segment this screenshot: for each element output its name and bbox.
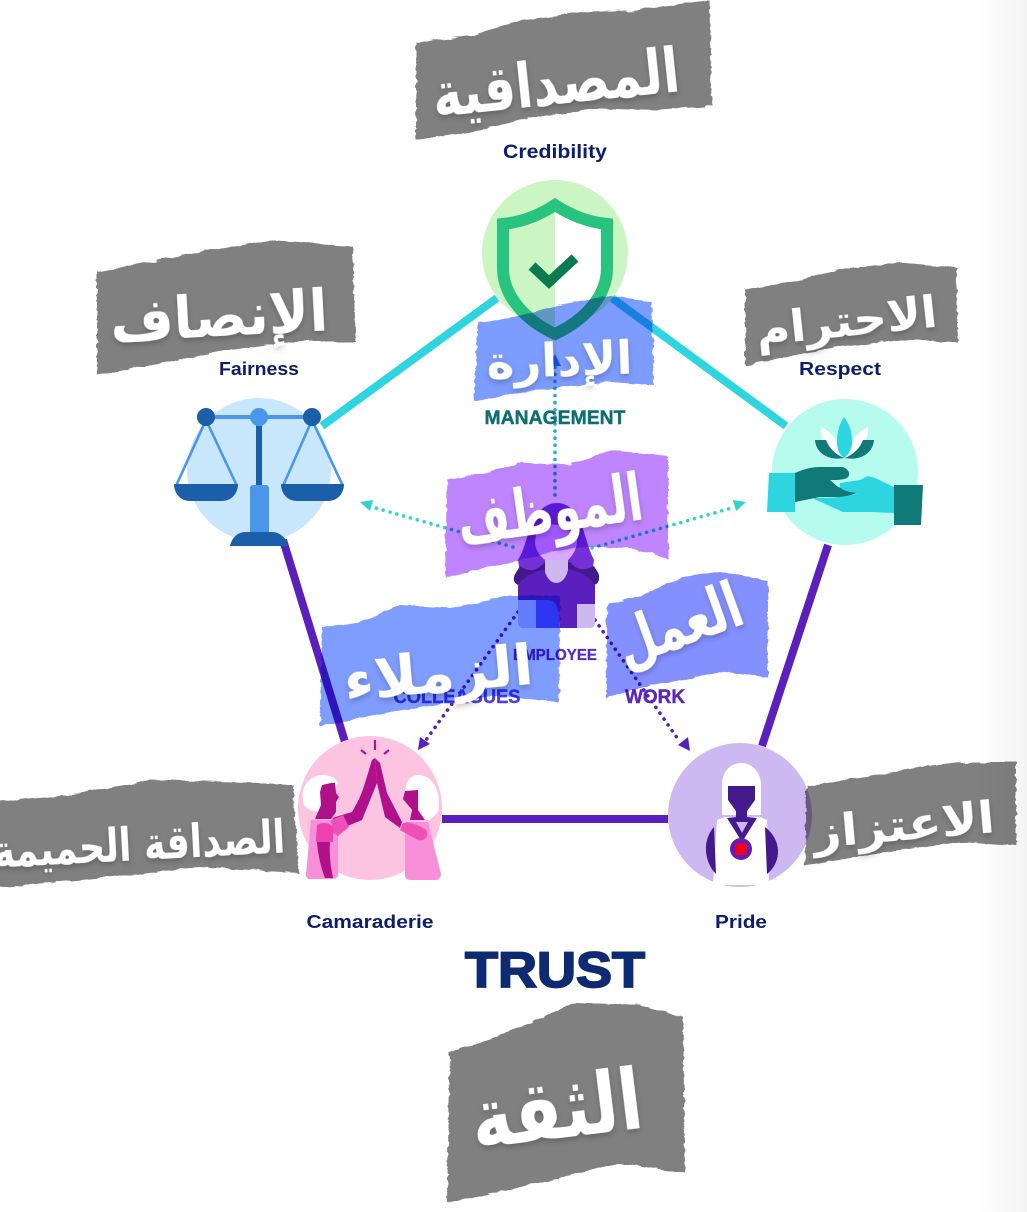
label: Credibility: Credibility <box>503 142 607 163</box>
Arabic heading: credibility: المصداقية <box>429 33 683 132</box>
label: TRUST: TRUST <box>465 942 645 998</box>
Arabic heading: management: الإدارة <box>486 330 633 390</box>
icon: fairness scales <box>174 398 344 546</box>
Arabic heading: work: العمل <box>605 568 753 682</box>
panel: patch work <box>606 572 768 698</box>
icon: employee figure <box>514 503 599 628</box>
icon: respect hands and lotus <box>767 399 923 545</box>
label: Respect: Respect <box>799 359 881 379</box>
panel: patch employee <box>445 450 668 578</box>
icon: pride medal <box>668 743 812 887</box>
panel: patch camaraderie <box>0 780 299 888</box>
panel: patch credibility <box>416 0 712 140</box>
icon: camaraderie high five <box>298 736 442 880</box>
dotted arrows from employee <box>360 354 746 751</box>
panel: patch pride <box>805 762 1016 866</box>
Arabic heading: employee: الموظف <box>452 459 647 562</box>
label: Pride: Pride <box>715 912 767 932</box>
label: COLLEAGUES: COLLEAGUES <box>394 687 520 708</box>
Arabic heading: pride: الاعتزاز <box>809 792 997 859</box>
Arabic heading: fairness: الإنصاف <box>108 276 330 357</box>
pentagon connecting lines <box>283 298 828 819</box>
panel: patch fairness <box>97 240 356 375</box>
Arabic heading: colleagues: الزملاء <box>341 633 536 714</box>
panel: patch trust <box>447 1002 685 1203</box>
label: EMPLOYEE: EMPLOYEE <box>513 647 597 664</box>
label: MANAGEMENT: MANAGEMENT <box>484 408 626 429</box>
label: WORK: WORK <box>625 687 685 708</box>
panel: patch management <box>474 296 654 402</box>
Arabic heading: respect: الاحترام <box>753 287 940 356</box>
Arabic heading: camaraderie: الصداقة الحميمة <box>0 809 286 879</box>
label: Camaraderie: Camaraderie <box>306 912 434 932</box>
label: Fairness: Fairness <box>219 359 299 379</box>
labels <box>219 142 881 998</box>
icon: credibility shield <box>482 180 628 334</box>
panel: patch respect <box>745 263 958 365</box>
Arabic heading: trust: الثقة <box>465 1050 648 1168</box>
panel: patch colleagues <box>320 596 560 727</box>
